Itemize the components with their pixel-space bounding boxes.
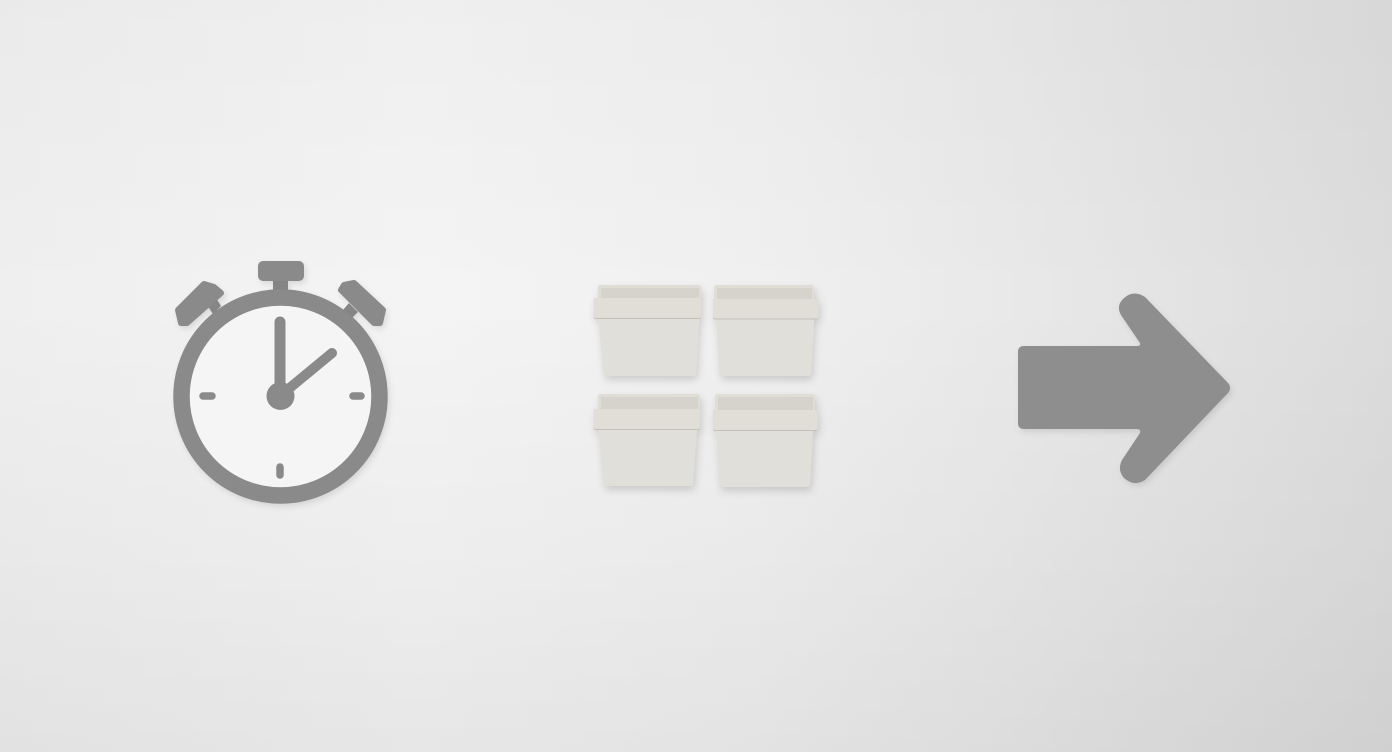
stopwatch hands xyxy=(266,322,332,410)
icon: four storage bins xyxy=(594,285,818,487)
bin: top left xyxy=(594,285,701,376)
icon: stopwatch xyxy=(178,261,383,496)
stopwatch hour ticks xyxy=(203,396,361,475)
bin: top right xyxy=(713,285,818,376)
bin: bottom right xyxy=(713,394,818,487)
stopwatch right button xyxy=(341,283,383,323)
icon: arrow xyxy=(1018,293,1230,483)
stopwatch crown xyxy=(258,261,304,292)
stopwatch left button xyxy=(178,284,221,323)
stopwatch ring xyxy=(182,298,380,496)
bin: bottom left xyxy=(594,394,700,486)
